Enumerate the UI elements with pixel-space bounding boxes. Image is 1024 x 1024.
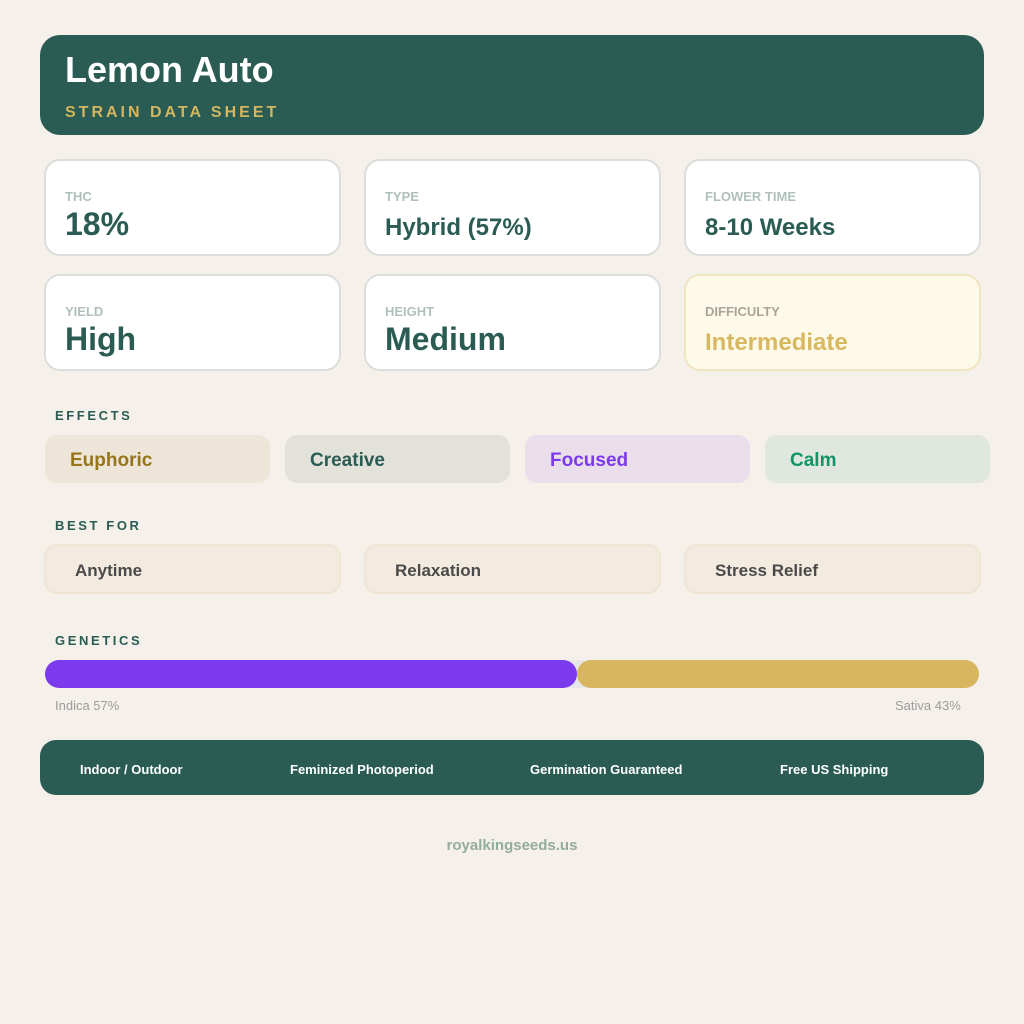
text: focused: Focused (550, 450, 628, 470)
value: 18%: 18% (65, 206, 129, 242)
text: anytime: Anytime (75, 560, 142, 580)
best-for tag: anytime (44, 544, 341, 594)
effect pill: focused (525, 435, 750, 483)
heading: effects: EFFECTS (55, 408, 132, 422)
feature: germination: Germination Guaranteed (530, 762, 682, 777)
stat card: flower time (684, 159, 981, 256)
value: intermediate: Intermediate (705, 329, 848, 356)
stat card: THC (44, 159, 341, 256)
text: calm: Calm (790, 450, 836, 470)
header banner (40, 35, 984, 135)
label: THC: THC (65, 188, 92, 204)
subtitle: STRAIN DATA SHEET (65, 104, 279, 121)
title: Lemon Auto (65, 48, 274, 90)
label: height: HEIGHT (385, 304, 434, 318)
text: creative: Creative (310, 450, 385, 470)
value: medium: Medium (385, 321, 506, 357)
heading: genetics: GENETICS (55, 632, 142, 648)
feature: feminized: Feminized Photoperiod (290, 762, 434, 777)
best-for tag: relaxation (364, 544, 661, 594)
label: difficulty: DIFFICULTY (705, 304, 780, 318)
bar segment: indica (45, 660, 577, 688)
label: type: TYPE (385, 188, 419, 204)
stat card: yield (44, 274, 341, 371)
feature: indoor outdoor: Indoor / Outdoor (80, 762, 183, 777)
text: relaxation: Relaxation (395, 560, 481, 580)
footer features bar (40, 740, 984, 795)
label: flower time: FLOWER TIME (705, 188, 796, 204)
stat card: difficulty (684, 274, 981, 371)
effect pill: creative (285, 435, 510, 483)
label: yield: YIELD (65, 304, 103, 318)
value: flower time: 8-10 Weeks (705, 214, 835, 241)
label: sativa share: Sativa 43% (895, 698, 961, 713)
bar segment: sativa (577, 660, 979, 688)
stat card: type (364, 159, 661, 256)
genetics bar (45, 660, 979, 688)
effect pill: calm (765, 435, 990, 483)
feature: shipping: Free US Shipping (780, 762, 888, 777)
website: royalkingseeds.us (447, 837, 577, 854)
label: indica share: Indica 57% (55, 698, 119, 713)
best-for tag: stress relief (684, 544, 981, 594)
text: euphoric: Euphoric (70, 450, 152, 470)
value: high: High (65, 321, 136, 357)
text: stress relief: Stress Relief (715, 560, 818, 580)
effect pill: euphoric (45, 435, 270, 483)
stat card: height (364, 274, 661, 371)
heading: best for: BEST FOR (55, 518, 142, 532)
value: hybrid: Hybrid (57%) (385, 214, 532, 241)
